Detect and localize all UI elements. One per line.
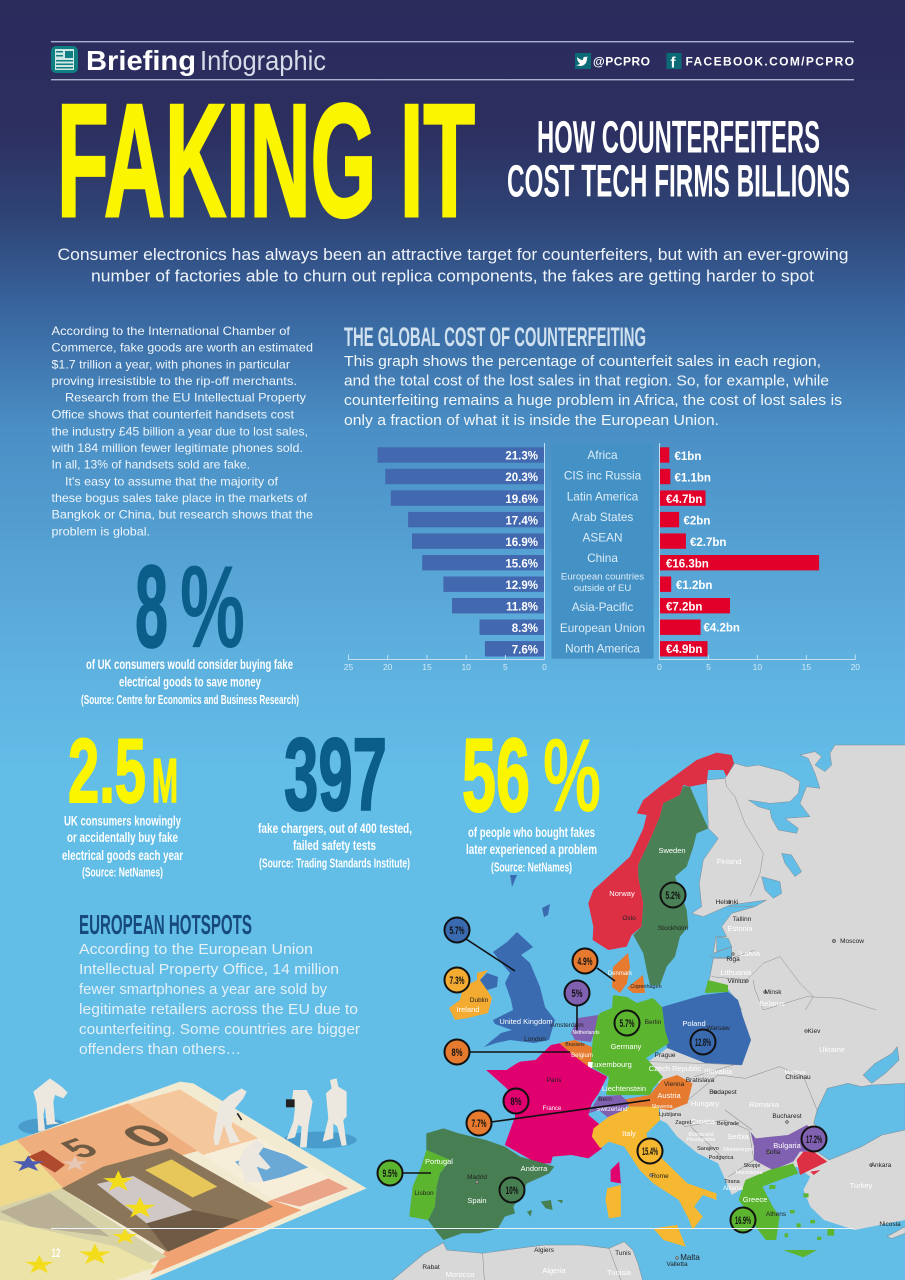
callout: Portugal 9.5% [378, 1160, 402, 1186]
figure 5 [323, 1078, 347, 1146]
stat: 56%: 56 [462, 718, 530, 834]
figure 2 [213, 1088, 247, 1145]
country and city labels: Moldova [785, 1070, 806, 1076]
stat: 2.5M: (Source: NetNames) [82, 866, 163, 880]
country and city labels: Denmark [608, 971, 633, 977]
section label: Briefing [86, 45, 196, 76]
countries: France, Iberia, Italy and others [409, 1043, 834, 1257]
intro text [58, 245, 848, 286]
callout: Ireland 7.3%: 7.3% [450, 975, 465, 987]
percentage values: 12.9% [505, 580, 538, 592]
cost values: €16.3bn [666, 558, 709, 570]
country and city labels: Paris [547, 1077, 562, 1084]
country and city labels: Amsterdam [550, 1022, 584, 1029]
stat: 397: (Source: Trading Standards Institute) [259, 856, 410, 870]
country and city labels: Greece [743, 1195, 767, 1204]
left article text: It's easy to assume that the majority of [65, 474, 279, 488]
callout: UK 5.7% [444, 918, 470, 942]
country and city labels: Chisinau [785, 1074, 811, 1081]
country and city labels: Belgium [571, 1053, 593, 1059]
chart heading: THE GLOBAL COST OF COUNTERFEITING [344, 322, 646, 352]
callout: Poland 12.8%: 12.8% [695, 1037, 711, 1049]
social links: f [670, 54, 676, 72]
stat: 56%: of people who bought fakes [468, 825, 595, 840]
stat: 2.5M: 2.5 [68, 721, 146, 822]
callout: Sweden 5.2%: 5.2% [666, 890, 681, 902]
cost values [666, 451, 740, 656]
country and city labels: Austria [657, 1091, 681, 1100]
figure 4 [286, 1090, 313, 1147]
country and city labels: Algeria [542, 1266, 566, 1275]
country and city labels: Montenegro [723, 1147, 753, 1153]
cost values: €1.1bn [674, 472, 711, 484]
figure 3 [238, 1139, 271, 1183]
country and city labels: Riga [726, 956, 740, 963]
left article text: $1.7 trillion a year, with phones in particular [52, 358, 290, 372]
country and city labels: Latvia [740, 949, 761, 958]
country and city labels: Sweden [658, 846, 686, 855]
country and city labels: Budapest [709, 1089, 737, 1096]
country and city labels: Bratislava [686, 1077, 715, 1084]
left article text: Research from the EU Intellectual Property [65, 390, 306, 404]
country and city labels: Tirana [724, 1179, 741, 1185]
country and city labels: Norway [609, 889, 635, 898]
country and city labels: Malta [680, 1253, 700, 1262]
chart axes: 20 [383, 662, 393, 672]
left article text: Office shows that counterfeit handsets cost [52, 408, 295, 422]
country and city labels: Ireland [457, 1005, 479, 1014]
stat: 8%: electrical goods to save money [119, 674, 261, 690]
region labels [560, 448, 645, 656]
percentage values: 21.3% [505, 451, 538, 463]
country and city labels: Sarajevo [697, 1146, 719, 1152]
social links: FACEBOOK.COM/PCPRO [686, 54, 854, 68]
country and city labels: Algiers [534, 1247, 555, 1254]
country and city labels: Brussels [565, 1042, 585, 1048]
region labels: ASEAN [582, 530, 622, 544]
stat: 8% [81, 541, 299, 707]
left article text: the industry £45 billion a year due to lost sales, [52, 424, 308, 438]
callout: Netherlands 5%: 5% [572, 988, 583, 1000]
callout: Portugal 9.5%: 9.5% [382, 1168, 398, 1180]
footer rule [51, 1228, 854, 1229]
European hotspots text: counterfeiting. Some countries are bigger [79, 1021, 360, 1038]
callout: Spain 10%: 10% [506, 1185, 519, 1197]
country and city labels: Dublin [470, 997, 489, 1004]
country and city labels: Estonia [727, 924, 753, 933]
country and city labels: Turkey [850, 1181, 873, 1190]
cost values: €4.2bn [704, 622, 740, 634]
percentage values: 15.6% [505, 558, 538, 570]
stat: 397: fake chargers, out of 400 tested, [258, 821, 412, 836]
map of Europe [378, 745, 905, 1280]
stat: 397: 397 [284, 717, 387, 832]
chart axes: 5 [706, 662, 711, 672]
callout: Spain 10% [500, 1178, 524, 1202]
percentage values [505, 451, 538, 656]
cyprus [887, 1227, 905, 1238]
country and city labels: Vilnius [727, 978, 747, 985]
country and city labels: Czech Republic [649, 1064, 702, 1073]
percentage values: 16.9% [505, 537, 538, 549]
region labels: European countries [561, 572, 644, 582]
chart axes: 25 [344, 662, 353, 672]
left article text [50, 324, 313, 538]
cost values: €7.2bn [666, 602, 702, 614]
country and city labels: Bulgaria [773, 1141, 802, 1150]
stat: 2.5M: UK consumers knowingly [64, 814, 181, 828]
left article text: problem is global. [52, 524, 150, 538]
country and city labels: Spain [467, 1196, 487, 1205]
black sea [814, 1083, 905, 1160]
chart description: This graph shows the percentage of counterfeit sales in each region, [344, 353, 821, 370]
section label [86, 45, 326, 76]
callout: France 8% [504, 1088, 528, 1114]
cost bars [660, 447, 819, 656]
country and city labels: Copenhagen [630, 984, 662, 990]
stat: 2.5M: M [152, 747, 178, 816]
country and city labels: Serbia [727, 1132, 750, 1141]
country and city labels: Liechtenstein [602, 1084, 646, 1093]
country and city labels [414, 846, 901, 1279]
cost values: €1.2bn [676, 580, 712, 592]
percentage values: 20.3% [505, 472, 538, 484]
callout: Greece 16.9% [730, 1208, 756, 1232]
callout: Austria 7.7% [466, 1110, 492, 1136]
callout: Poland 12.8% [690, 1030, 716, 1054]
country and city labels: Madrid [467, 1174, 487, 1181]
callout: Ireland 7.3% [444, 968, 470, 992]
left article text: In all, 13% of handsets sold are fake. [52, 458, 250, 472]
country and city labels: Luxembourg [590, 1060, 632, 1069]
chart axes: 10 [461, 662, 471, 672]
land: central Europe, Balkans, Ukraine [390, 1010, 905, 1280]
region labels: CIS inc Russia [564, 468, 642, 482]
left article text: Commerce, fake goods are worth an estimated [52, 340, 313, 354]
European hotspots text: According to the European Union [79, 941, 313, 958]
callout: UK 5.7%: 5.7% [450, 925, 465, 937]
country and city labels: Valletta [666, 1261, 688, 1268]
country and city labels: Ukraine [819, 1045, 845, 1054]
callout: Denmark 4.9%: 4.9% [578, 956, 593, 968]
figure 1 [33, 1078, 68, 1132]
cost values: €1bn [674, 451, 701, 463]
blurred bottom-left corner [0, 1188, 167, 1280]
region labels: China [587, 551, 618, 565]
non-EU land north and east [692, 745, 905, 1043]
section label: Infographic [200, 45, 326, 76]
country and city labels: Herzegovina [687, 1137, 715, 1143]
callout: Greece 16.9%: 16.9% [735, 1215, 751, 1227]
chart axes [344, 443, 860, 672]
country and city labels: Skopje [744, 1163, 760, 1169]
stat: 56% [462, 718, 601, 874]
callout: Italy 15.4% [638, 1138, 662, 1164]
subtitle [507, 112, 850, 206]
European hotspots text: Intellectual Property Office, 14 million [79, 961, 339, 978]
country and city labels: Morocco [446, 1270, 474, 1279]
banknote denomination: 0 [107, 1117, 187, 1155]
country and city labels: Rabat [422, 1264, 440, 1271]
country: Sweden [633, 786, 708, 985]
cost values: €4.7bn [666, 494, 702, 506]
country and city labels: London [524, 1036, 546, 1043]
stat: 397: failed safety tests [293, 838, 376, 853]
country and city labels: Ankara [871, 1162, 892, 1169]
shadows [18, 1118, 357, 1148]
chart axes: 15 [802, 662, 811, 672]
country and city labels: Vienna [664, 1081, 684, 1088]
stat: 8%: 8 [135, 541, 168, 672]
chart axes: 10 [753, 662, 762, 672]
country and city labels: Stockholm [658, 925, 688, 932]
country and city labels: Athens [766, 1211, 787, 1218]
region labels: Latin America [567, 490, 639, 504]
country and city labels: Zagreb [675, 1120, 693, 1126]
country and city labels: Moscow [840, 938, 864, 945]
header bar [51, 41, 854, 80]
country and city labels: Hungary [691, 1099, 719, 1108]
callout: Sweden 5.2% [660, 882, 686, 908]
heading: European hotspots: EUROPEAN HOTSPOTS [79, 909, 252, 940]
percentage values: 11.8% [506, 601, 538, 613]
title: FAKING IT [57, 71, 475, 251]
stat: 56%: later experienced a problem [466, 842, 597, 857]
country and city labels: Bosnia and [688, 1132, 714, 1138]
country and city labels: Slovenia [651, 1104, 673, 1110]
country and city labels: Poland [682, 1019, 706, 1028]
country and city labels: Macedonia [736, 1170, 763, 1176]
central door artwork [62, 1148, 273, 1252]
blue evidence patch [235, 1147, 308, 1182]
country and city labels: Tunis [615, 1250, 632, 1257]
chart description: only a fraction of what it is inside the European Union. [344, 412, 719, 429]
callout: Netherlands 5% [564, 980, 590, 1006]
stat: 8%: % [180, 541, 245, 672]
region label panel [552, 443, 654, 659]
country and city labels: Tallinn [733, 916, 752, 923]
country and city labels: Italy [622, 1129, 636, 1138]
callout: Belgium 8% [444, 1040, 470, 1064]
country and city labels: Belgrade [717, 1121, 739, 1127]
country and city labels: Albania [723, 1186, 744, 1192]
country: Norway [588, 753, 734, 950]
country and city labels: Finland [717, 857, 741, 866]
country and city labels: Oslo [622, 915, 636, 922]
country and city labels: Helsinki [716, 899, 738, 906]
region labels: European Union [560, 621, 645, 635]
country and city labels: Lithuania [721, 968, 752, 977]
stat: 397 [258, 717, 412, 870]
European hotspots text: legitimate retailers across the EU due to [79, 1001, 358, 1018]
callout: Germany 5.7% [614, 1010, 640, 1036]
icon: briefing document [51, 46, 78, 73]
photo: banknote with forensic figures [0, 1078, 367, 1280]
country and city labels: Podgorica [709, 1155, 734, 1161]
social links: @PCPRO [593, 54, 650, 68]
percentage values: 17.4% [505, 515, 538, 527]
stat: 8%: (Source: Centre for Economics and Business Research) [81, 693, 299, 707]
intro text: number of factories able to churn out replica components, the fakes are getting harder to spot [91, 266, 814, 286]
region labels: Arab States [572, 510, 633, 524]
country and city labels: Germany [611, 1042, 642, 1051]
European hotspots text: offenders than others… [79, 1041, 241, 1058]
left article text: these bogus sales take place in the markets of [52, 491, 308, 505]
European hotspots text: fewer smartphones a year are sold by [79, 981, 327, 998]
banknote paper [0, 1082, 367, 1280]
country and city labels: Rome [651, 1173, 669, 1180]
callout: Italy 15.4%: 15.4% [642, 1146, 658, 1158]
callout: Denmark 4.9% [572, 948, 598, 974]
chart axes: 20 [851, 662, 860, 672]
percentage bars [378, 447, 544, 656]
country and city labels: Belarus [759, 999, 785, 1008]
left article text: with 184 million fewer legitimate phones sold. [50, 441, 303, 455]
chart axes: 5 [503, 662, 508, 672]
stat: 2.5M [62, 721, 184, 880]
country and city labels: Minsk [765, 989, 782, 996]
country and city labels: Nicosia [879, 1221, 901, 1228]
country and city labels: Portugal [425, 1157, 453, 1166]
percentage values: 8.3% [512, 623, 538, 635]
callout: Austria 7.7%: 7.7% [472, 1118, 487, 1130]
countries: Poland, Germany, Benelux [559, 980, 751, 1095]
cost values: €2.7bn [690, 537, 726, 549]
countries: UK, Ireland, Denmark [449, 875, 645, 1047]
social links [575, 53, 854, 72]
country and city labels: Prague [655, 1052, 676, 1059]
country and city labels: Kiev [808, 1028, 821, 1035]
country and city labels: Sofia [766, 1149, 781, 1156]
chart description [344, 353, 842, 429]
chart description: and the total cost of the lost sales in that region. So, for example, while [344, 372, 829, 390]
callout: Germany 5.7%: 5.7% [620, 1018, 635, 1030]
stat: 8%: of UK consumers would consider buying fake [86, 657, 293, 672]
page number: 12 [52, 1246, 61, 1260]
country and city labels: Ljubljana [659, 1112, 682, 1118]
percentage values: 7.6% [512, 644, 538, 656]
callout: France 8%: 8% [510, 1096, 522, 1108]
left article text: proving irresistible to the rip-off merchants. [52, 374, 297, 388]
callout: Bulgaria 17.2%: 17.2% [806, 1134, 822, 1146]
stat: 2.5M: electrical goods each year [62, 848, 184, 863]
country and city labels: United Kingdom [499, 1017, 553, 1026]
chart description: counterfeiting remains a huge problem in Africa, the cost of lost sales is [344, 392, 842, 409]
cost values: €2bn [684, 515, 710, 527]
stat: 2.5M: or accidentally buy fake [67, 830, 178, 845]
intro text: Consumer electronics has always been an attractive target for counterfeiters, but with an ever-growing [58, 245, 848, 264]
country and city labels: Tunisia [607, 1268, 632, 1277]
left article text: Bangkok or China, but research shows that the [52, 508, 313, 522]
region labels: Africa [587, 448, 618, 462]
country and city labels: Berlin [645, 1019, 662, 1026]
chart axes: 0 [657, 662, 662, 672]
chart axes: 0 [542, 662, 547, 672]
stat: 56%: % [543, 718, 601, 834]
banknote denomination: 5 [51, 1133, 109, 1164]
north africa [390, 1242, 643, 1280]
country and city labels: France [543, 1106, 562, 1112]
European hotspots text [79, 941, 360, 1058]
country and city labels: Bern [598, 1096, 612, 1103]
country and city labels: Bucharest [772, 1113, 802, 1120]
country and city labels: Slovakia [704, 1067, 733, 1076]
chart axes: 15 [422, 662, 432, 672]
percentage values: 19.6% [505, 494, 538, 506]
country and city labels: Switzerland [596, 1107, 628, 1113]
region labels: North America [565, 642, 640, 656]
lakes [717, 853, 802, 952]
left article text: According to the International Chamber of [52, 324, 291, 338]
region labels: Asia-Pacific [572, 600, 633, 614]
stat: 56%: (Source: NetNames) [491, 860, 572, 874]
banknote denomination [51, 1117, 187, 1164]
country and city labels: Netherlands [573, 1030, 600, 1036]
region labels: outside of EU [574, 583, 631, 594]
capital city markers [476, 900, 872, 1260]
country and city labels: Lisbon [414, 1190, 434, 1197]
euro stars [25, 1170, 156, 1273]
country and city labels: Romania [749, 1100, 780, 1109]
country and city labels: Warsaw [706, 1025, 730, 1032]
cost values: €4.9bn [666, 644, 702, 656]
callout: Bulgaria 17.2% [802, 1126, 826, 1152]
mediterranean east [773, 1207, 905, 1280]
country and city labels: Andorra [521, 1164, 548, 1173]
sea of azov [863, 1047, 899, 1083]
butterfly bar chart [344, 443, 860, 672]
country and city labels: Croatia [691, 1117, 716, 1126]
callout: Belgium 8%: 8% [452, 1047, 463, 1059]
leader lines [402, 939, 650, 1173]
